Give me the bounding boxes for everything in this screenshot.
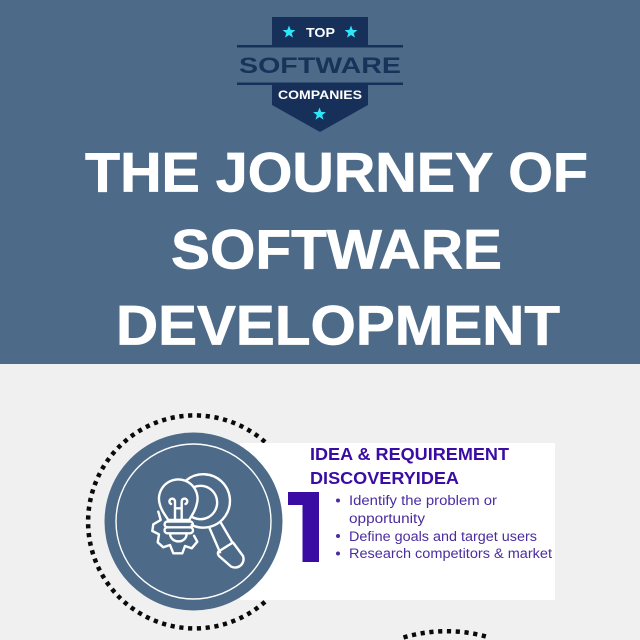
bullet list: Research competitors & market — [349, 546, 552, 561]
logo badge — [237, 17, 403, 132]
bullet list: Define goals and target users — [349, 529, 537, 544]
logo badge: SOFTWARE — [239, 53, 401, 78]
bullet list: Identify the problem or — [349, 493, 498, 508]
title: THE JOURNEY OF — [85, 142, 588, 204]
number 1: 1 — [276, 467, 341, 598]
header panel — [0, 0, 640, 364]
logo badge: COMPANIES — [278, 90, 362, 102]
logo badge: TOP — [306, 25, 335, 40]
bullet list — [336, 493, 552, 561]
heading: IDEA & REQUIREMENT — [310, 444, 509, 464]
icon: lightbulb, magnifier and gear — [152, 474, 244, 568]
text card — [240, 443, 555, 600]
title: SOFTWARE — [171, 218, 502, 280]
step circle — [104, 432, 282, 610]
title — [85, 142, 588, 356]
dotted ring — [88, 415, 267, 628]
heading: DISCOVERYIDEA — [310, 468, 459, 488]
panel: step 1 — [88, 415, 555, 628]
title: DEVELOPMENT — [116, 294, 560, 356]
bullet list: opportunity — [349, 511, 425, 526]
number 1 — [288, 492, 319, 562]
dotted ring: next step — [404, 631, 490, 638]
heading — [310, 444, 509, 488]
